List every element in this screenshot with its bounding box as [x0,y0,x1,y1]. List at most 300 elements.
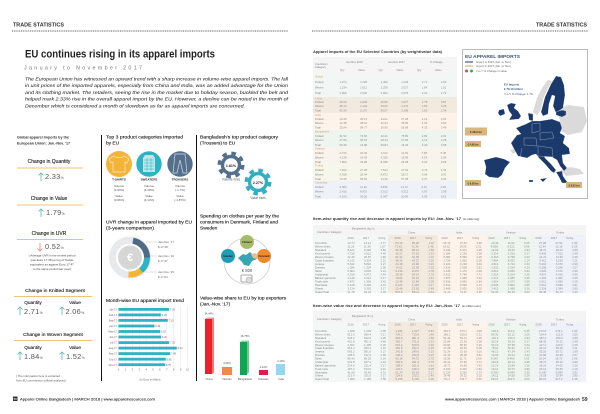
table 1: apparel imports by country: 59.36 13.98 60.84 14.34 2.49 2.58 [340,143,447,147]
table 3: value by item: Skirts [315,356,322,360]
map non-EU countries [510,80,587,176]
table 3: value by item: Dresses [315,353,326,357]
table 3: value by item: Jerseys [315,350,325,354]
table 1: apparel imports by country: % Change [430,60,443,64]
table 3: value by item: 214.6 221.4 3.17 198.4 201.6 1.61 18.72 19.36 3.42 22.14 22.86 3.25 14.16 14.62 3.25 [348,363,578,367]
table 2: quantity by item: Woven trousers [315,255,334,259]
icon: t-shirt [106,151,132,177]
table 1: apparel imports by country: Total [315,177,321,181]
map EU total callout: EU Imports [504,82,520,86]
right page header: TRADE STATISTICS [536,22,588,28]
table 1: apparel imports by country: Knitted [315,100,324,104]
heading: Bangladesh's top product category [200,134,279,140]
left page header: TRADE STATISTICS [13,22,65,28]
table 3: value by item: China [408,318,416,322]
bar chart: 10 [186,368,189,372]
category labels: Value [145,194,153,198]
bar chart: Sep-17 [109,352,118,356]
table 1: apparel imports by country: 12.38 28.64 12.94 29.50 4.52 3.00 [340,121,447,125]
table 2: quantity by item: Babies' garments [315,276,336,280]
icon: gear value: 2.27% [253,181,264,185]
table 2: quantity by item: Coats & jackets [315,258,334,262]
change in woven segment [14,332,92,361]
table 2: quantity by item: 1.286 1.324 2.95 14.62 15.08 3.15 2.416 2.508 3.81 1.932 2.014 4.24 3.186 3.268 2.57 [348,266,578,270]
right footer: www.apparelresources.com | MARCH 2018 | Apparel Online Bangladesh [445,398,580,402]
icon: gear volume: 1.81% [226,164,237,168]
change in knitted segment: 2.71% [24,307,43,316]
table 1: apparel imports by country: Woven [315,121,324,125]
donut legend [145,240,174,279]
bar chart: Jul-17 [110,341,118,345]
table 1: apparel imports by country: Countries / [315,62,328,66]
bar chart: 6.85 [167,358,172,361]
icon: trousers [167,151,193,177]
category labels: (-1.87%) [174,198,186,202]
subtitle: January to November 2017 [24,66,142,72]
table 2: quantity by item: Turkey [556,230,565,234]
panel heading: Global apparel imports by the [17,136,69,140]
table 2: quantity by item: 8.124 8.436 3.84 96.35 98.14 1.86 5.146 5.372 4.39 14.63 15.06 2.94 18.72 18.03 3.69 [348,248,578,252]
table 1: apparel imports by country: Knitted [315,117,324,121]
map EU total callout: € 78.16 billion [504,87,523,91]
bar chart: 8.44 [178,347,183,350]
table 3: value by item: 7,000 7,180 2.58 5,155 5,220 1.26 711.2 734.7 3.30 643.0 662.5 3.03 904.6 917.2 1.39 [348,377,578,381]
change in knitted segment: 2.06% [66,307,85,316]
3D bar chart: Vietnam [222,377,233,381]
table 3: value by item: 1,462 1,495 2.26 613.4 620.5 1.16 63.84 65.92 3.26 94.16 97.38 3.42 147.2 143.6 2.45 [348,343,578,347]
bar chart: Feb-17 [109,313,118,317]
change in UVR [17,231,83,271]
map country callouts: € 8.62 bn [569,184,580,188]
change in UVR: Change in UVR [32,231,67,237]
right footer: 59 [582,397,588,403]
table 2: quantity by item: 5.632 5.816 3.27 24.18 24.96 3.23 3.124 3.218 3.01 4.612 4.724 2.43 5.216 5.372 2.99 [348,262,578,266]
table 2: quantity by item: 9.142 9.334 2.10 48.16 49.22 2.20 1.728 1.816 5.09 7.864 8.032 2.14 3.412 3.518 3.11 [348,258,578,262]
category labels: (4.40%) [144,188,154,192]
bar chart: Mar-17 [109,318,118,322]
bar chart: 2 [132,368,134,372]
table 1: apparel imports by country: Category [315,65,327,69]
bar chart: 9 [180,368,182,372]
table 2: quantity by item: India [456,230,462,234]
table 1: apparel imports by country: 3.684 11.26 3.835 11.72 4.10 4.09 [340,185,446,189]
table 2: quantity by item: Sweaters [315,248,327,252]
heading [200,214,279,232]
heading: UVR change in apparel imported by EU [106,220,193,226]
table 2: quantity by item: Underwear [315,272,328,276]
table 2: quantity by item: 6.318 6.472 2.44 28.36 29.14 2.75 3.612 3.746 3.71 2.916 3.014 3.36 4.872 4.916 0.90 [348,272,578,276]
table 1: apparel imports by country: Knitted [315,80,324,84]
category labels: Volume [144,184,154,188]
donut legend: Jan-Nov. '15 [158,270,174,274]
table 2: quantity by item: Countries / Category [317,230,342,234]
table 2: quantity by item: 2016 2017 %chg 2016 2017 %chg 2016 2017 %chg 2016 2017 %chg 2016 2017 %chg [348,236,574,240]
heading [106,220,193,232]
bar chart: Jan-17 [109,308,118,312]
heading: Spending on clothes per year by the [200,214,279,220]
panel heading: European Union: Jan.-Nov. '17 [17,142,70,146]
table 1: apparel imports by country: Total [315,108,321,112]
heading: (Trousers) to EU [200,140,236,146]
category labels: Volume [175,184,185,188]
table 2: quantity by item: Others [315,286,324,290]
heading: Top 3 product categories imported [106,134,183,140]
table 1: apparel imports by country: India [315,113,321,117]
table 1: apparel imports by country: 45.26 1,036 46.05 1,027 1.75 0.87 [340,100,447,104]
table 1: apparel imports by country: Total [315,91,321,95]
table 3: value by item: Countries / Category [317,317,342,321]
table 2: quantity by item: Swimwear [315,283,327,287]
donut legend: Jan-Nov. '16 [158,254,174,258]
bar chart: 0 [118,368,120,372]
table 1: apparel imports by country: Global [315,74,323,78]
table 1: apparel imports by country: Jan-Nov 2016 [346,60,363,64]
table 1: apparel imports by country: 6.918 29.44 6.872 29.17 0.66 0.92 [340,172,447,176]
table 3: value by item: 321.4 331.6 3.17 224.6 230.2 2.49 28.46 29.32 3.02 14.12 14.58 3.26 23.18 23.84 2.85 [348,374,578,378]
table 3: value by item: Track suits [315,367,329,371]
infographic: spending circle: Finland [242,240,252,244]
table 3: value by item [313,311,586,382]
panel: UVR change [106,220,193,279]
heading: Value-wise share to EU by top exporters [200,296,287,302]
change in woven segment: Change in Woven Segment [23,332,83,338]
bar chart: 5.20 [155,325,161,328]
table 1: apparel imports by country: Qty Value Qty Value Qty Value [340,68,442,72]
panel: value-wise share [200,296,287,381]
table 3: value by item: 618.2 642.6 3.95 963.5 981.4 1.86 51.46 53.72 4.39 146.3 150.6 2.94 187.2 180.3 3.69 [348,336,578,340]
table 2: quantity by item: 91.78 94.04 2.46 521.6 534.2 2.42 71.12 73.47 3.30 64.30 66.25 3.03 90.46 91.72 1.39 [348,290,578,294]
map legend: Y-o-Y % Change in value [476,69,508,73]
map: EU apparel imports [462,50,588,198]
table 2: quantity by item [313,225,586,294]
change in quantity [17,159,83,181]
table 3: value by item: 1,028 1,049 2.06 1,036 1,027 0.87 261.3 274.1 4.90 104.5 110.2 5.45 273.8 279.1 1.94 [348,329,578,333]
table 3: value by item: Knit shirts [315,329,327,333]
intro text block: helped mark 2.33% rise in the overall apparel import by the EU. However, a decline can be noted in the month of [25,97,289,102]
icon: gear volume: Volume rises [222,178,241,182]
3D bar chart: 4.19% [277,359,285,363]
title: EU continues rising in its apparel imports [25,48,215,60]
map EU total callout: Y-o-Y % Change: 1.79 [504,92,533,96]
table 1: apparel imports by country: 1,234 1,012 1,256 1,027 1.84 1.52 [340,86,447,90]
intro text block [25,76,289,108]
panel: top 3 product categories [106,134,193,202]
table 3: value by item: Grand Total [315,377,329,381]
change in value: 1.79% [46,208,65,217]
table 1: apparel imports by country: Knitted [315,134,324,138]
bar chart: 7.10 [169,320,174,322]
3D bar chart [204,312,285,381]
bar chart: 6.20 [162,336,167,339]
map country callouts [465,128,582,188]
table 1: apparel imports by country: 4.138 14.63 4.326 15.06 4.54 2.94 [340,156,447,160]
table 3: value by item: Swimwear [315,370,327,374]
left footer [13,396,155,402]
table 2: quantity by item: China [408,230,416,234]
table 3: value by item: Others [315,374,324,378]
category labels: Value [115,194,123,198]
bar chart: Apr-17 [109,324,118,328]
table 2 title: Item-wise quantity rise and decrease in apparel imports by EU: Jan.-Nov. '17 (in million kg) [313,217,479,221]
change in woven segment: Quantity [24,345,42,350]
3D bar chart: 16.75% [240,334,250,338]
3D bar chart: 34.44% [204,312,214,316]
table 3: value by item: 128.6 132.4 2.95 146.2 150.8 3.15 24.16 25.08 3.81 19.32 20.14 4.24 31.86 32.68 2.57 [348,353,578,357]
3D bar chart: China [205,377,213,381]
category labels: T-SHIRTS [112,178,126,182]
table 1: apparel imports by country: 93.39 2,170 95.07 2,199 1.80 1.34 [340,108,447,112]
map country callouts: € 6.08 bn [468,182,479,186]
table 1: apparel imports by country: 7.864 25.08 8.338 26.08 6.03 3.99 [340,160,447,164]
table 1: apparel imports by country: 25.84 54.77 26.96 56.68 4.33 3.49 [340,126,447,130]
table 3: value by item: Coats & jackets [315,346,334,350]
donut legend: $ 17.38 [158,245,168,249]
icon: gear value [246,170,270,200]
table 3: value by item: 86.40 89.20 3.24 92.16 94.72 2.78 11.38 11.72 2.99 8.140 8.460 3.93 16.24 16.72 2.96 [348,356,578,360]
heading: (3-years comparison) [106,226,154,232]
heading [200,134,279,146]
table 2: quantity by item: Woven shirts [315,244,331,248]
table 3: value by item: Babies' garments [315,363,336,367]
change in UVR: 0.52% [45,242,64,251]
table 3: value by item: Woven trousers [315,343,334,347]
bar chart: 5 [152,368,154,372]
table 2: quantity by item: Jerseys [315,262,325,266]
table 1: apparel imports by country: Vietnam [315,146,326,150]
category labels: (-1.7%) [175,188,185,192]
source note: ( The information here is extracted [16,374,60,378]
bar chart: Oct-17 [109,357,118,361]
infographic: spending circle: Sweden [223,254,233,258]
table 3: value by item: 41.80 43.60 4.31 61.24 63.18 3.17 5.120 5.260 2.73 8.360 8.640 3.35 6.140 6.380 3.91 [348,370,578,374]
bar chart [108,307,189,382]
intro text block: December which is considered a month of slowdown as far as apparel imports are concerned. [25,103,245,108]
table 1: apparel imports by country: Total [315,143,321,147]
table 1: apparel imports by country: Cambodia [315,180,328,184]
category labels: SWEATERS [141,178,157,182]
3D bar chart: Pakistan [258,377,269,381]
map legend [465,60,511,73]
icon: sweater [136,151,162,177]
table 1: apparel imports by country: 48.13 1,134 49.02 1,172 1.84 3.35 [340,104,447,108]
change in value [17,196,83,217]
icon: gear value: Value rises [250,196,266,200]
table 3: value by item: 563.2 581.6 3.27 241.8 249.6 3.23 31.24 32.18 3.01 46.12 47.24 2.43 52.16 53.72 2.99 [348,350,578,354]
table 3: value by item: 2016 2017 %chg 2016 2017 %chg 2016 2017 %chg 2016 2017 %chg 2016 2017 %chg [348,322,574,326]
table 3: value by item: Knit trousers [315,339,331,343]
bar chart: 8 [173,368,175,372]
infographic: spending circle [221,235,271,284]
table 2: quantity by item: 22.46 22.87 1.83 61.34 62.05 1.16 6.384 6.592 3.26 9.416 9.738 3.42 14.72 14.36 2.45 [348,255,578,259]
heading: (Jan.-Nov. '17) [200,302,230,308]
change in knitted segment: Quantity [24,300,42,305]
panel: global apparel imports change [14,136,92,382]
bar chart: 7.33 [170,308,175,312]
bar chart: Aug-17 [109,346,118,350]
change in woven segment: 1.52% [66,352,85,361]
map legend: Import in 2016 (Jan. to Nov.) [476,60,511,64]
table 3: value by item: Underwear [315,360,328,364]
change in knitted segment [14,288,92,316]
bar chart: (In Euro in billion) [140,378,161,382]
table 1: apparel imports by country: Woven [315,138,324,142]
left footer: Apparel Online Bangladesh | MARCH 2018 | www.apparelresources.com [20,398,155,402]
panel: month-wise trend [106,298,189,382]
table 1: apparel imports by country: 1,374 1,028 1,406 1,049 2.71 2.06 [340,80,447,84]
donut legend: $ 17.47 [158,259,168,263]
table 1: apparel imports by country: Woven [315,104,324,108]
table 1: apparel imports by country: 6.100 20.20 6.347 20.93 4.05 3.61 [340,194,447,198]
intro text block: The European Union has witnessed an upward trend with a sharp increase in volume-wise apparel imports. The fall [25,76,289,82]
panel: Bangladesh top product [200,134,279,200]
donut legend: Jan-Nov. '17 [158,240,174,244]
table 1: apparel imports by country: Bangladesh [315,130,330,134]
table 2: quantity by item: 1.872 1.936 3.42 12.46 12.84 3.05 0.916 0.942 2.84 1.614 1.672 3.59 2.012 2.056 2.19 [348,280,578,284]
change in value: Change in Value [31,196,68,202]
table 1: apparel imports by country: Total [315,160,321,164]
3D bar chart: Bangladesh [238,377,253,381]
infographic: spending circle: Denmark [258,254,270,258]
bar chart: 6 [159,368,161,372]
dividers between columns [102,135,196,381]
table 1: apparel imports by country: Woven [315,156,324,160]
infographic: spending circle: € 800 [242,268,253,273]
bar chart: Jun-17 [109,335,118,339]
bar chart: 1 [125,368,127,372]
change in knitted segment: Value [69,300,81,305]
table 1: apparel imports by country: Jan-Nov 2017 [388,60,405,64]
table 2: quantity by item: Knit shirts [315,241,327,245]
table 3: value by item: Sweaters [315,336,327,340]
category labels [112,178,188,202]
category labels: Value [176,194,184,198]
table 1: apparel imports by country: 2.416 8.937 2.512 9.212 3.97 3.08 [340,190,447,194]
heading: Month-wise EU apparel import trend [106,298,184,304]
table 3: value by item: 431.8 451.2 4.49 362.7 371.8 2.51 21.84 22.36 2.38 32.14 33.16 3.17 68.42 70.12 2.48 [348,339,578,343]
table 1: apparel imports by country: Knitted [315,168,324,172]
intro text block: and its clothing market. The retailers, seeing the rise in the market due to holiday season, buckled the belt and [25,90,289,95]
3D bar chart: 2.44% [260,365,268,369]
map title: EU APPAREL IMPORTS [465,54,521,60]
icon: gear volume [220,154,242,182]
map EU countries [484,76,570,183]
heading [200,296,287,308]
table 1: apparel imports by country: 3.726 10.45 4.012 11.02 7.68 5.45 [340,151,447,155]
category labels: TROUSERS [172,178,188,182]
table 1: apparel imports by country: Knitted [315,151,324,155]
heading: consumers in Denmark, Finland and [200,220,278,226]
table 1: apparel imports by country [313,57,457,199]
bar chart: 6.75 [166,364,171,367]
table 1: apparel imports by country: Total [315,194,321,198]
table 1: apparel imports by country: 14.38 56.82 14.39 57.08 0.07 0.46 [340,177,447,181]
table 1: apparel imports by country: Woven [315,190,324,194]
table 1: apparel imports by country: Turkey [315,164,324,168]
category labels: (2.90%) [114,188,124,192]
table 2: quantity by item: 0.864 0.892 3.24 9.216 9.472 2.78 1.138 1.172 2.99 0.814 0.846 3.93 1.624 1.672 2.96 [348,269,578,273]
table 3: value by item: Vietnam [506,318,517,322]
table 3: value by item: Turkey [556,318,565,322]
map country callouts: € 4.86 bn [468,144,479,146]
table 1: apparel imports by country: China [315,96,323,100]
heading [106,134,183,146]
left footer: 58 [14,397,17,401]
table 3: value by item: India [456,318,462,322]
source note: from EU commission (official analysis)) [16,378,66,382]
table 1: apparel imports by country: Woven [315,172,324,176]
change in UVR: ( Average UVR in the review period [29,254,76,258]
change in quantity: 2.33% [45,172,64,181]
change in UVR: in the same period last year) [33,267,71,271]
table 2: quantity by item: Bangladesh (kg m) [352,226,375,230]
donut legend: $ 17.54 [158,275,168,279]
bar chart: 4 [145,368,147,372]
bar chart: 7.48 [171,353,176,356]
category labels: (0.96%) [114,198,124,202]
category labels: Volume [114,184,124,188]
table 1: apparel imports by country: Total [315,126,321,130]
table 1: apparel imports by country: 13.46 26.13 14.02 27.18 4.16 4.02 [340,117,447,121]
donut chart: € [127,252,133,264]
bar chart: Nov-17 [109,363,118,367]
change in UVR: was Euro 17.38 per kg of Textile [31,258,74,262]
map EU total callout [504,82,533,96]
table 2: quantity by item: Knit trousers [315,252,331,256]
bar chart: May-17 [108,330,118,334]
table 1: apparel imports by country: Knitted [315,185,324,189]
heading: Sweden [200,226,218,232]
bar chart: 7.33 [170,342,175,345]
table 3: value by item: 187.2 193.6 3.42 124.6 128.4 3.05 9.160 9.420 2.84 16.14 16.72 3.59 20.12 20.56 2.19 [348,367,578,371]
table 1 title: Apparel imports of the EU Selected Countries (by weight/value data) [313,50,443,54]
icon: gear value: ↑ [257,176,259,180]
bar chart: 6.18 [162,314,167,317]
bar chart: 3 [138,368,140,372]
table 3: value by item: Bangladesh (€ m) [352,314,373,318]
table 2: quantity by item: 0.418 0.436 4.31 6.124 6.318 3.17 0.512 0.526 2.73 0.836 0.864 3.35 0.614 0.638 3.91 [348,283,578,287]
heading: by EU [106,140,120,146]
table 2: quantity by item: 4.318 4.512 4.49 36.27 37.18 2.51 2.184 2.236 2.38 3.214 3.316 3.17 6.842 7.012 2.48 [348,252,578,256]
table 3: value by item: 631.8 647.2 2.44 283.6 291.4 2.75 36.12 37.46 3.71 29.16 30.14 3.36 48.72 49.16 0.90 [348,360,578,364]
bar chart: 7 [166,368,168,372]
map legend: Import in 2017 (Jan. to Nov.) [476,64,511,68]
table 2: quantity by item: Grand Total [315,290,329,294]
table 3 title: Item-wise value rise and decrease in apparel imports by EU: Jan.-Nov. '17 (in million euro) [313,304,481,308]
intro text block: in unit prices of the imported apparels, especially from China and India, was an added advantage for the Union [25,83,289,88]
table 1: apparel imports by country: Woven [315,86,324,90]
panel: spending on clothes [200,214,279,284]
map country callouts: € 38.0 bn [470,130,482,134]
table 3: value by item: Woven shirts [315,332,331,336]
table 2: quantity by item: 3.214 3.316 3.17 22.46 23.02 2.49 2.846 2.932 3.02 1.412 1.458 3.26 2.318 2.384 2.85 [348,286,578,290]
change in knitted segment: Change in Knitted Segment [25,288,86,294]
change in quantity: Change in Quantity [28,159,71,165]
change in UVR: equivalent as against Euro 17.47 [30,262,74,266]
source note [16,374,66,382]
table 1: apparel imports by country: 31.52 73.66 32.41 75.80 2.82 2.91 [340,134,447,138]
table 2: quantity by item: Dresses [315,266,326,270]
table 1: apparel imports by country: 7.462 27.38 7.514 27.91 0.70 1.94 [340,168,447,172]
table 2: quantity by item: Skirts [315,269,322,273]
table 2: quantity by item: Track suits [315,280,329,284]
table 2: quantity by item: 2.146 2.214 3.17 19.84 20.16 1.61 1.872 1.936 3.42 2.214 2.286 3.25 1.416 1.462 3.25 [348,276,578,280]
table 2: quantity by item: Vietnam [506,230,517,234]
3D bar chart: India [278,377,284,381]
bar chart: 6.02 [161,331,166,334]
table 3: value by item: 812.6 838.4 3.17 724.2 713.6 1.46 186.2 190.5 2.31 89.36 92.12 3.09 124.4 121.8 2.09 [348,332,578,336]
table 1: apparel imports by country: 27.84 66.15 28.43 67.66 2.12 2.28 [340,138,447,142]
change in woven segment: 1.84% [24,352,43,361]
